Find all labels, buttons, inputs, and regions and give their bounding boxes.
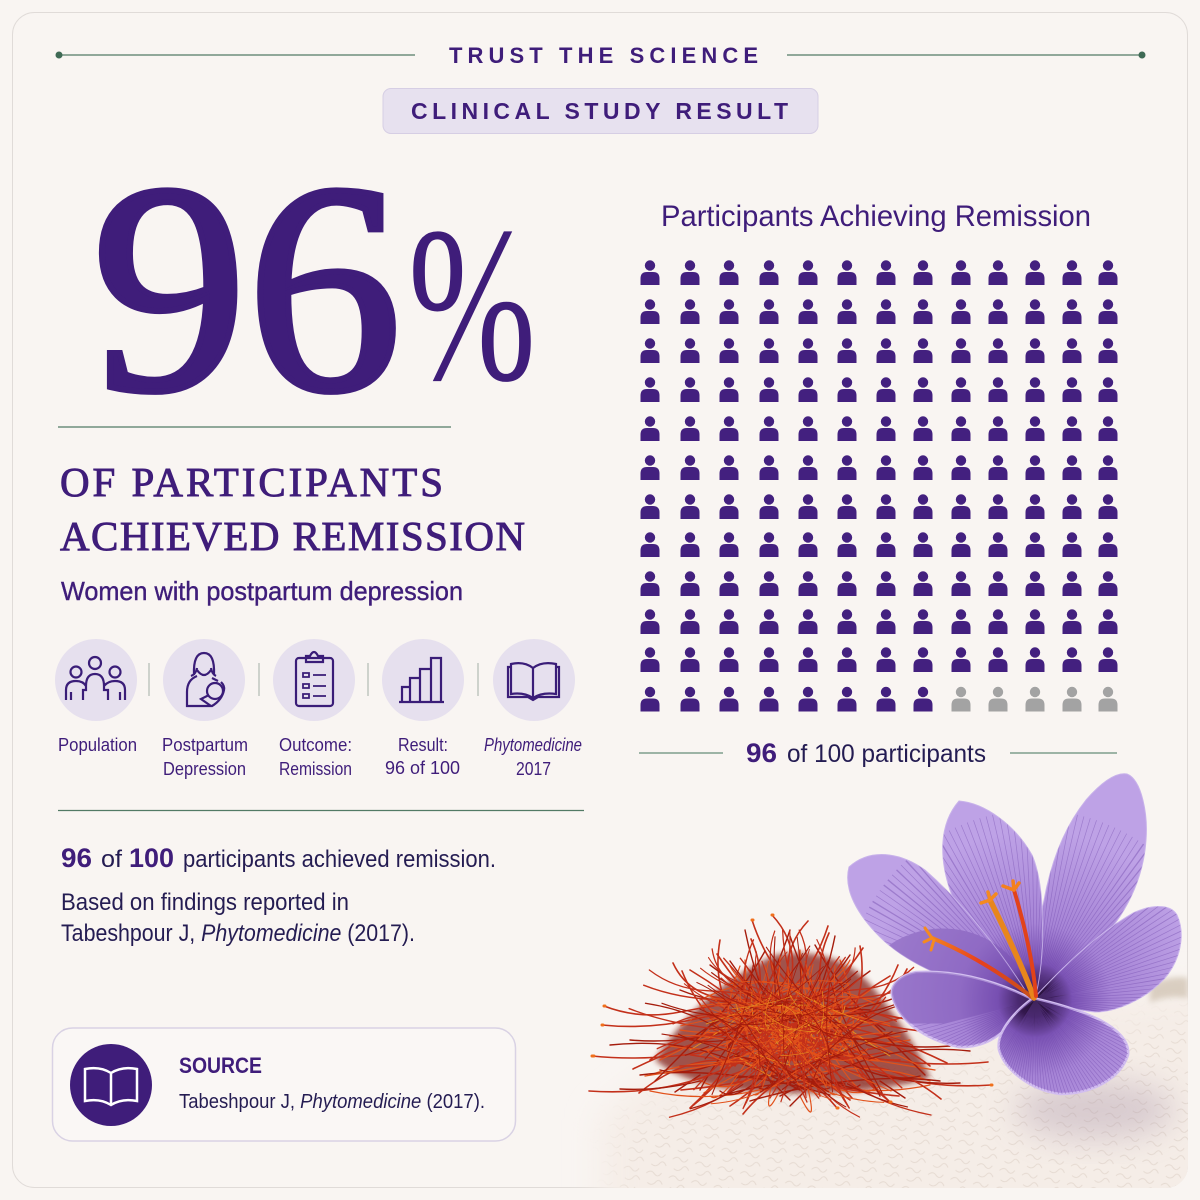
big stat: 96%: % <box>408 182 536 428</box>
floor surface <box>596 974 1188 1188</box>
subheading: Women with postpartum depression <box>61 576 463 606</box>
chart title: Participants Achieving Remission <box>661 200 1091 233</box>
icon: mother and baby <box>163 639 245 721</box>
pictogram caption: of 100 participants <box>787 740 986 768</box>
source card <box>52 1028 516 1141</box>
icon labels <box>58 735 582 779</box>
citation text <box>61 889 415 947</box>
result statement <box>61 843 496 873</box>
icon labels: Phytomedicine <box>484 735 582 755</box>
petal: lower left <box>890 970 1030 1048</box>
pictogram: 96 of 100 participants <box>640 260 1118 712</box>
icon: open book <box>493 639 575 721</box>
icon labels: Population <box>58 735 137 755</box>
icon row <box>55 639 575 721</box>
icon labels: 2017 <box>516 759 551 779</box>
source card: SOURCE <box>179 1053 262 1078</box>
icon: bar chart <box>382 639 464 721</box>
result statement: participants achieved remission. <box>183 846 496 873</box>
icon: population <box>55 639 137 721</box>
result statement: 96 <box>61 843 92 873</box>
icon labels: Depression <box>163 759 246 779</box>
icon labels: Postpartum <box>162 735 248 755</box>
heading: of participants achieved remission: ACHIEVED REMISSION <box>60 513 525 559</box>
citation text: Tabeshpour J, Phytomedicine (2017). <box>61 920 415 947</box>
source card: Tabeshpour J, Phytomedicine (2017). <box>179 1091 485 1113</box>
icon labels: 96 of 100 <box>385 758 460 778</box>
petal: top right <box>1038 773 1147 994</box>
stamens <box>924 881 1036 998</box>
icon: clipboard checklist <box>273 639 355 721</box>
icon labels: Remission <box>279 759 352 779</box>
petal: bottom <box>997 998 1130 1096</box>
icon labels: Result: <box>398 735 448 755</box>
petal: right <box>1038 906 1182 1012</box>
result statement: of <box>101 846 122 873</box>
pictogram caption <box>639 738 1117 768</box>
icon: source book <box>70 1044 152 1126</box>
result statement: 100 <box>129 843 174 873</box>
heading: of participants achieved remission: OF PARTICIPANTS <box>60 459 443 505</box>
petal: top left <box>942 800 1044 992</box>
pictogram caption: 96 <box>746 738 777 768</box>
flower shadow <box>1015 1080 1175 1140</box>
badge: Clinical study result: CLINICAL STUDY RESULT <box>411 98 788 124</box>
heading: of participants achieved remission <box>60 459 525 559</box>
saffron threads pile <box>588 914 994 1118</box>
header: Trust the Science <box>56 43 1146 68</box>
big stat: 96% <box>92 122 536 454</box>
petal: left <box>847 854 1026 994</box>
citation text: Based on findings reported in <box>61 889 349 916</box>
big stat: 96%: 96 <box>92 122 402 454</box>
header: Trust the Science: TRUST THE SCIENCE <box>449 43 758 68</box>
crocus flower <box>848 774 1181 1095</box>
illustration: saffron threads and crocus flower <box>588 773 1188 1188</box>
badge: Clinical study result <box>383 88 818 134</box>
icon labels: Outcome: <box>279 735 352 755</box>
